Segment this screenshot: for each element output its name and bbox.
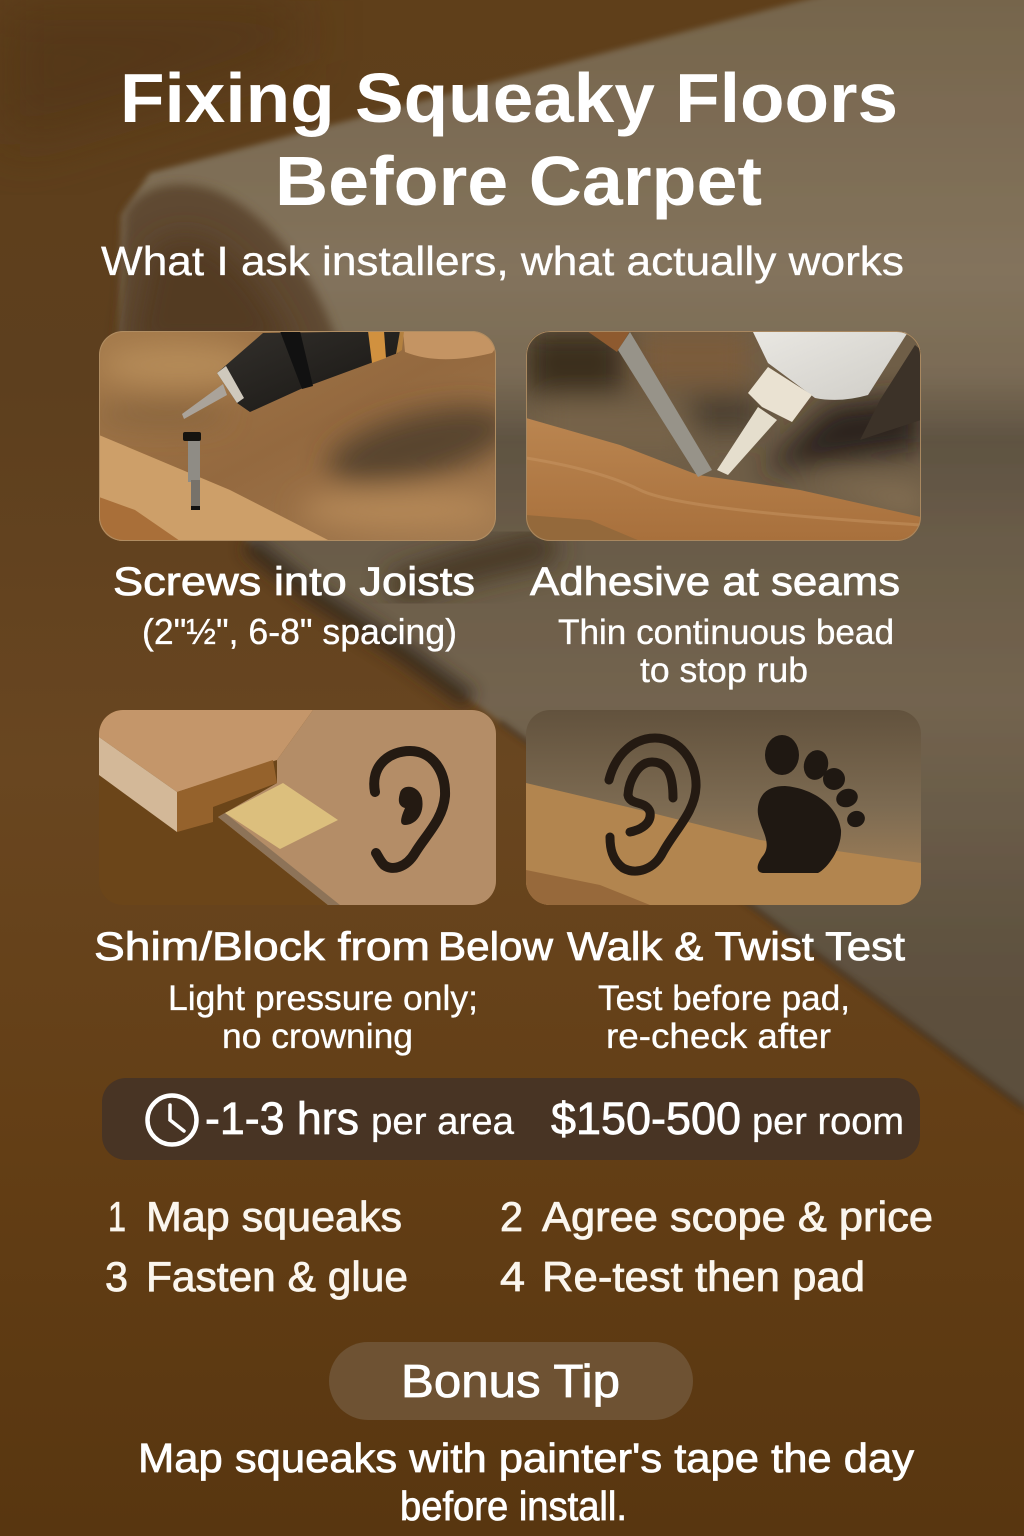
heading: shim/block from below: [94, 925, 553, 969]
text: screw spec: (2"½", 6-8" spacing): [142, 611, 457, 652]
text: shim detail: no crowning: [222, 1017, 413, 1056]
shim: [225, 783, 338, 849]
wood board: [99, 435, 330, 541]
panel: adhesive at seams photo: [526, 331, 921, 541]
heading: walk and twist test: Walk & Twist Test: [567, 925, 905, 969]
step 4: 4: [500, 1253, 525, 1300]
heading: adhesive at seams: Adhesive at seams: [530, 560, 900, 604]
text: adhesive detail: [558, 613, 894, 690]
wood seam board: [526, 418, 921, 541]
text: adhesive detail: to stop rub: [640, 651, 808, 690]
text: shim detail: Light pressure only;: [168, 979, 478, 1018]
text: test detail: re-check after: [606, 1017, 831, 1056]
heading: screws into joists: Screws into Joists: [113, 560, 475, 604]
step 1: Map squeaks: [146, 1193, 402, 1240]
text: cost estimate: per room: [752, 1101, 904, 1143]
icon: clock: [148, 1096, 196, 1144]
bonus tip pill: Bonus Tip: [401, 1355, 620, 1407]
text: cost estimate: $150-500: [551, 1093, 741, 1144]
text: test detail: Test before pad,: [598, 979, 850, 1018]
time and cost strip: [102, 1078, 920, 1160]
text: adhesive detail: Thin continuous bead: [558, 613, 894, 652]
icon: putty knife: [587, 331, 712, 477]
bonus tip text: [138, 1435, 915, 1529]
panel: walk and twist test photo: [526, 710, 921, 905]
text: time estimate: -1-3 hrs: [205, 1093, 359, 1144]
title: [120, 59, 898, 220]
wood plank: [526, 783, 921, 905]
icon: drill: [182, 331, 404, 419]
bonus tip text: Map squeaks with painter's tape the day: [138, 1435, 915, 1481]
step 2: 2: [500, 1193, 523, 1240]
text: time estimate: per area: [371, 1101, 515, 1143]
icon: screw: [183, 432, 201, 510]
text: cost estimate: [551, 1093, 904, 1144]
subtitle: What I ask installers, what actually works: [101, 238, 904, 284]
icon: footprint: [758, 735, 867, 873]
wood subfloor: [218, 710, 496, 905]
title: Before Carpet: [275, 142, 762, 220]
step 3: 3: [105, 1253, 128, 1300]
panel: screws into joists photo: [90, 331, 520, 541]
bonus tip text: before install.: [400, 1483, 627, 1529]
step 3: Fasten & glue: [146, 1253, 408, 1300]
board side: [177, 760, 277, 832]
heading: shim/block from below: Below: [438, 925, 553, 969]
icon: ear: [374, 751, 445, 868]
panel: shim and block photo: [99, 710, 496, 905]
heading: shim/block from below: Shim/Block from: [94, 925, 430, 969]
board top: [99, 710, 313, 792]
icon: hand: [403, 331, 495, 359]
text: test detail: [598, 979, 850, 1056]
board end grain: [99, 737, 177, 832]
text: time estimate: [205, 1093, 515, 1144]
title: Fixing Squeaky Floors: [120, 59, 898, 137]
step 4: Re-test then pad: [542, 1253, 865, 1300]
icon: glue bottle: [717, 332, 921, 475]
step 2: Agree scope & price: [542, 1193, 933, 1240]
text: shim detail: [168, 979, 478, 1056]
bonus tip pill: [329, 1342, 693, 1420]
step 1: 1: [108, 1193, 126, 1240]
icon: ear: [609, 738, 696, 871]
